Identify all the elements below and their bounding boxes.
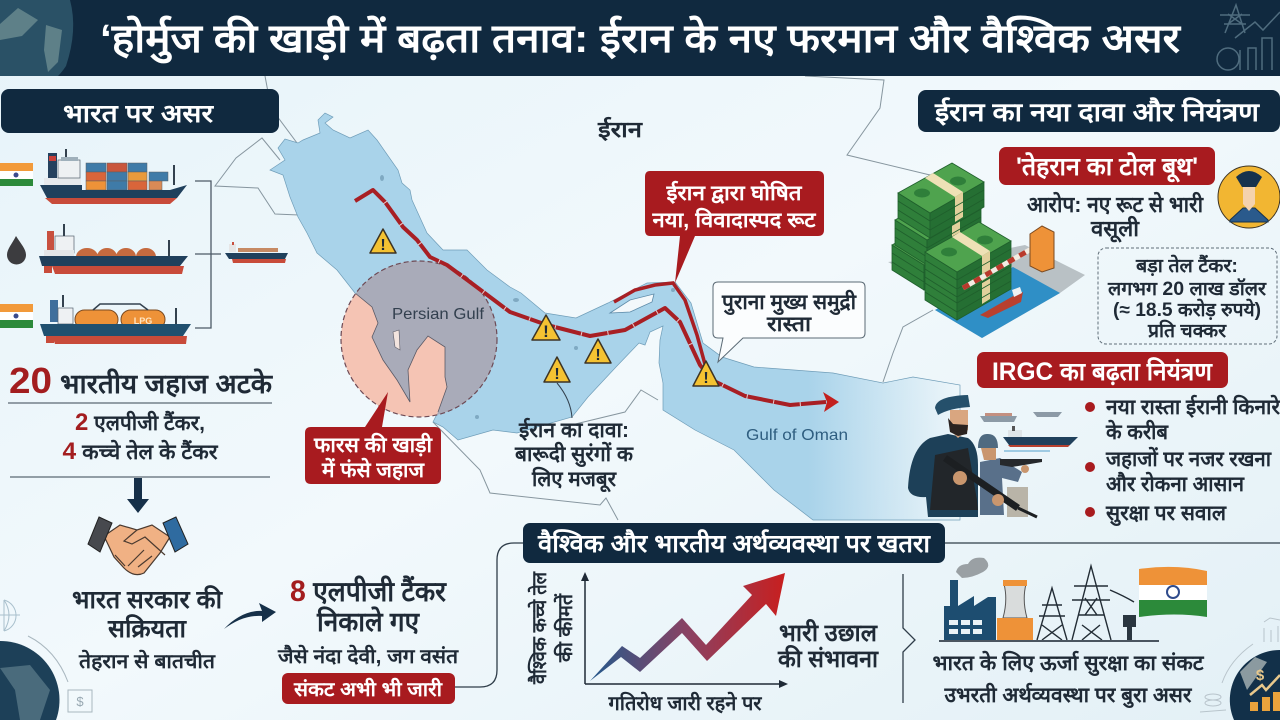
warning icons (370, 229, 719, 386)
icon: officer (1218, 166, 1280, 228)
icon: LPG tanker: LPG (134, 316, 152, 326)
text: accusation: वसूली (1090, 215, 1140, 243)
text: big jump: की संभावना (777, 645, 879, 673)
header band (0, 0, 1280, 76)
text: Iran mine claim: ईरान का दावा: (518, 417, 629, 442)
list: IRGC bullets: के करीब (1105, 419, 1169, 444)
icon: India flag bottom (0, 304, 33, 328)
heading (918, 90, 1280, 132)
icon: energy infrastructure (939, 558, 1159, 641)
icon: money stacks and toll gate (888, 163, 1085, 338)
text: 8 LPG tankers: जैसे नंदा देवी, जग वसंत (277, 644, 460, 668)
list: IRGC bullets: जहाजों पर नजर रखना (1105, 446, 1273, 471)
label: Gulf of Oman: Gulf of Oman (746, 427, 848, 444)
text: government action: तेहरान से बातचीत (78, 649, 217, 673)
icon: container ship (40, 149, 187, 204)
label: Iran: ईरान (597, 116, 643, 142)
text: energy security: भारत के लिए ऊर्जा सुरक्षा का संकट (932, 650, 1205, 677)
Qeshm island (610, 294, 654, 313)
icon: LPG tanker (40, 295, 191, 344)
bottom-left globe (0, 600, 92, 720)
callout: old route: पुराना मुख्य समुद्री (721, 289, 858, 316)
list: IRGC bullets (1085, 394, 1280, 527)
bottom-left globe: $ (76, 694, 84, 709)
water (270, 113, 960, 520)
icon: India flag top (0, 163, 33, 186)
islands (380, 175, 675, 419)
callout: stranded ships: में फंसे जहाज (321, 457, 425, 482)
badge: crisis ongoing (282, 673, 455, 704)
callout: old route (713, 282, 865, 362)
map: Persian Gulf and Gulf of Oman: ! (595, 347, 601, 364)
text: accusation (1027, 191, 1204, 243)
text: government action: सक्रियता (107, 614, 188, 643)
stat: 20 ships: भारतीय जहाज अटके (60, 368, 273, 399)
callout: tanker toll cost: बड़ा तेल टैंकर: (1135, 254, 1238, 277)
label: y axis: की कीमतें (553, 592, 577, 663)
divider (8, 403, 272, 477)
badge: IRGC (977, 352, 1228, 388)
panel: economic threat (455, 523, 1280, 720)
map: Persian Gulf and Gulf of Oman: ! (554, 366, 560, 383)
list: IRGC bullets: और रोकना आसान (1106, 471, 1245, 496)
title: ‘होर्मुज की खाड़ी में बढ़ता तनाव: ईरान के नए फरमान और वैश्विक असर (100, 15, 1182, 64)
callout: stranded ships (305, 392, 441, 484)
icon: oil drop (7, 236, 26, 264)
stat: 20 ships (9, 360, 273, 401)
text: accusation: आरोप: नए रूट से भारी (1027, 191, 1204, 217)
old route line with arrow (355, 190, 839, 412)
callout: tanker toll cost: लगभग 20 लाख डॉलर (1107, 278, 1267, 300)
icon: small ship (225, 242, 288, 263)
list: IRGC bullets: नया रास्ता ईरानी किनारे (1105, 394, 1280, 419)
panel: Iran's claim and control (888, 90, 1280, 527)
connector lines (455, 543, 1280, 687)
callout: tanker toll cost: (≈ 18.5 करोड़ रुपये) (1113, 298, 1261, 321)
text: 8 LPG tankers: 8 एलपीजी टैंकर (290, 575, 447, 608)
badge: crisis ongoing: संकट अभी भी जारी (293, 677, 443, 701)
text: Iran mine claim: बारूदी सुरंगों क (514, 441, 634, 468)
map: Persian Gulf and Gulf of Oman: ! (380, 237, 386, 254)
text: government action: भारत सरकार की (72, 585, 224, 614)
text: energy security: उभरती अर्थव्यवस्था पर बुरा असर (944, 682, 1193, 709)
label: y axis (527, 571, 577, 685)
text: tankers: 4 कच्चे तेल के टैंकर (62, 438, 219, 465)
text: 8 LPG tankers (277, 575, 460, 668)
badge: Tehran toll booth (999, 147, 1215, 185)
icon: header globe (0, 0, 73, 76)
chart: oil price rise (581, 572, 788, 688)
icon: header economy (1217, 5, 1280, 70)
text: government action (72, 585, 224, 673)
icon: soldiers and ships (908, 395, 1078, 517)
heading (523, 523, 945, 563)
icon: bottom-right globe and chart: $ (1256, 667, 1265, 684)
text: 8 LPG tankers: निकाले गए (316, 606, 420, 637)
new route line (614, 283, 706, 368)
label: x axis: गतिरोध जारी रहने पर (608, 691, 762, 715)
stat: 20 ships: 20 (9, 360, 52, 401)
badge: Tehran toll booth: 'तेहरान का टोल बूथ' (1016, 152, 1198, 183)
icon: handshake (88, 517, 188, 575)
icon: oil tanker (39, 224, 188, 274)
label: y axis: वैश्विक कच्चे तेल (527, 571, 551, 685)
text: big jump: भारी उछाल (779, 619, 879, 647)
callout: tanker toll cost: प्रति चक्कर (1147, 319, 1227, 342)
arrow: curved (224, 603, 276, 629)
badge: IRGC: IRGC का बढ़ता नियंत्रण (992, 357, 1213, 386)
callout: tanker toll cost (1098, 248, 1277, 344)
stranded-ships circle (340, 260, 498, 418)
divider chevron (903, 574, 915, 703)
land borders (215, 76, 933, 520)
heading: impact on India (1, 89, 279, 133)
label: Persian Gulf: Persian Gulf (392, 306, 485, 323)
map: Persian Gulf and Gulf of Oman: ! (703, 370, 709, 387)
panel: impact on India (0, 89, 460, 720)
icon: bottom-right globe and chart (1200, 618, 1280, 720)
arrow: down (127, 478, 149, 513)
heading: impact on India: भारत पर असर (63, 100, 215, 128)
callout: new route (645, 171, 824, 283)
text: big jump (777, 619, 879, 673)
text: Iran mine claim (514, 383, 634, 493)
heading: वैश्विक और भारतीय अर्थव्यवस्था पर खतरा (537, 529, 932, 558)
icon: India flag (1139, 567, 1207, 617)
text: tankers: 2 एलपीजी टैंकर, (75, 409, 205, 436)
heading: ईरान का नया दावा और नियंत्रण (934, 97, 1260, 127)
text: tankers (62, 409, 219, 465)
map: Persian Gulf and Gulf of Oman: ! (543, 322, 549, 341)
text: Iran mine claim: लिए मजबूर (531, 466, 617, 493)
callout: new route: नया, विवादास्पद रूट (651, 207, 817, 232)
map: Persian Gulf and Gulf of Oman (215, 76, 960, 520)
bracket connector (195, 181, 221, 328)
callout: stranded ships: फारस की खाड़ी (313, 432, 434, 457)
text: energy security (932, 650, 1205, 709)
callout: old route: रास्ता (766, 313, 813, 336)
callout: new route: ईरान द्वारा घोषित (665, 180, 803, 205)
list: IRGC bullets: सुरक्षा पर सवाल (1105, 502, 1227, 527)
